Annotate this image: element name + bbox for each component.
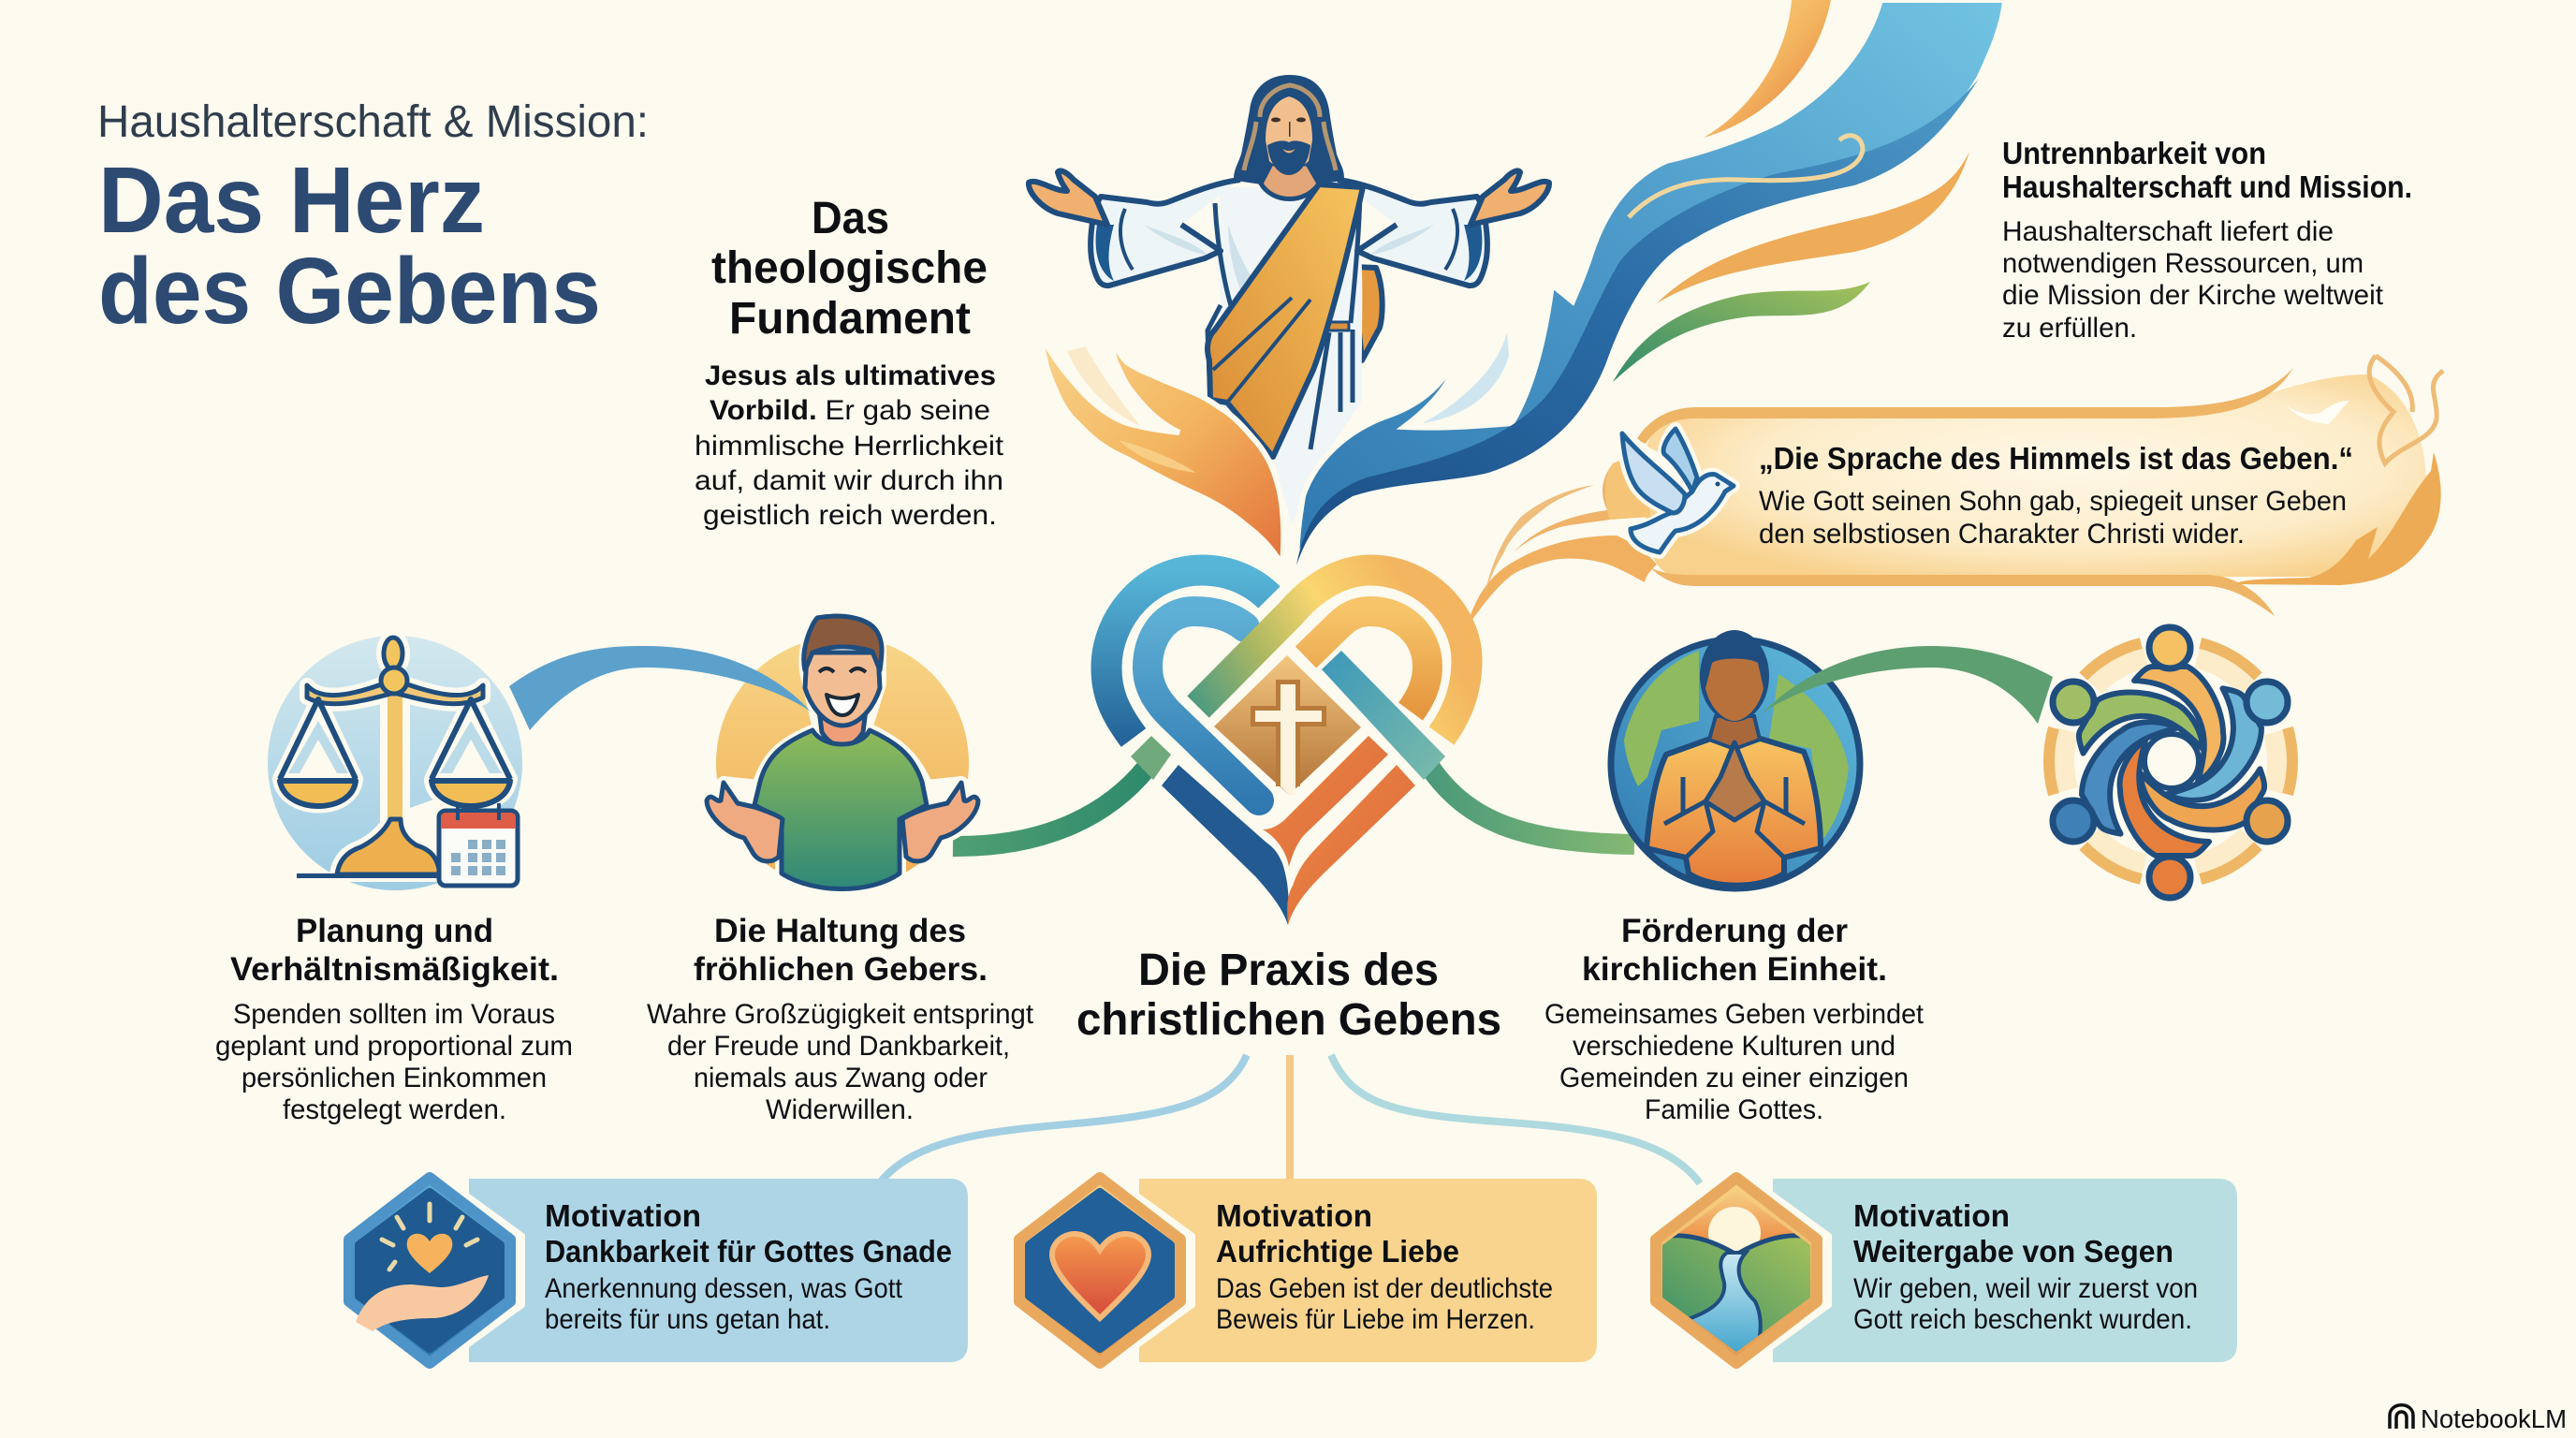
card: sincere love: [1007, 1168, 1597, 1372]
quote body: Wie Gott seinen Sohn gab, spiegeit unser Geben: [1759, 486, 2347, 517]
body: [1216, 1273, 1553, 1335]
body: Wahre Großzügigkeit entspringt: [647, 999, 1034, 1030]
ring glow: [2064, 654, 2277, 868]
body: [1631, 475, 1734, 552]
text block: inseparability: [2002, 136, 2412, 344]
left arm: [707, 783, 783, 861]
heading: [2002, 136, 2412, 204]
right pan: [432, 699, 510, 806]
icon: balance scale with calendar: [268, 636, 522, 890]
hair: [1237, 78, 1341, 182]
center hole: [2144, 734, 2199, 788]
right arm and sleeve: [1338, 180, 1487, 286]
body: persönlichen Einkommen: [242, 1063, 547, 1093]
left hand: [1029, 170, 1107, 225]
icon: praying figure on globe: [1611, 630, 1860, 888]
tunic: [1213, 187, 1362, 524]
flow: orange and green streams: [1613, 0, 1969, 382]
lower-right flame border: [2237, 452, 2441, 585]
heart: [407, 1234, 452, 1273]
mouth: [1282, 149, 1295, 154]
central heading: christlichen Gebens: [1076, 995, 1501, 1045]
body: Haushalterschaft liefert die: [2002, 216, 2334, 247]
body: notwendigen Ressourcen, um: [2002, 248, 2364, 279]
pivot: [381, 668, 407, 694]
river: [1689, 1251, 1763, 1352]
blue outer strand: [1106, 570, 1269, 738]
body: geistlich reich werden.: [703, 500, 997, 531]
circle: [716, 637, 969, 889]
hair: [1700, 630, 1769, 722]
heading: [1853, 1198, 2174, 1269]
sash: [1208, 184, 1363, 457]
torso lines: [1208, 192, 1360, 449]
heading: Dankbarkeit für Gottes Gnade: [545, 1234, 952, 1269]
ribbon darker band: [1296, 79, 1979, 565]
sleeve cuffs: [1120, 209, 1457, 270]
hills: [1658, 1236, 1814, 1357]
ribbon gold swirl: [1629, 136, 1863, 217]
arc: green connector: [1762, 646, 2053, 724]
torso: [1647, 737, 1821, 886]
body: [695, 360, 1004, 531]
left pan: [280, 699, 356, 806]
body: [1853, 1273, 2198, 1335]
body: Anerkennung dessen, was Gott: [545, 1273, 903, 1304]
front wing: [1622, 433, 1685, 513]
shirt: [754, 730, 927, 889]
heading: [694, 913, 988, 988]
icon: hand with heart: [337, 1168, 522, 1372]
card: gratitude: [337, 1168, 968, 1372]
bottom border: [1650, 567, 2275, 616]
quote body: den selbstiosen Charakter Christi wider.: [1759, 519, 2245, 550]
central heading: Die Praxis des: [1138, 946, 1439, 995]
ground line: [297, 873, 442, 878]
arc: blue connector: [509, 646, 811, 730]
body: auf, damit wir durch ihn: [695, 465, 1003, 496]
body: Vorbild. Er gab seine: [710, 395, 990, 426]
teal strand: [1322, 651, 1445, 780]
blue inner strand: [1148, 611, 1259, 800]
neck: [819, 710, 866, 746]
heading: Förderung der: [1621, 913, 1848, 949]
right arm: [902, 783, 978, 861]
rays: [382, 1204, 477, 1269]
heading: Fundament: [729, 294, 971, 344]
logo mark: [2390, 1405, 2413, 1429]
card background: [469, 1179, 968, 1362]
callout fill: [1644, 374, 2426, 577]
main title: [98, 148, 601, 344]
pan inner panes: [288, 721, 502, 773]
body: verschiedene Kulturen und: [1573, 1031, 1895, 1062]
panel: quote callout: [1467, 356, 2443, 627]
body: bereits für uns getan hat.: [545, 1304, 830, 1335]
title block: [97, 97, 649, 344]
sleeve folds: [1664, 777, 1805, 858]
body: geplant und proportional zum: [215, 1031, 573, 1062]
flame highlight: [1119, 440, 1196, 473]
logo text: NotebookLM: [2421, 1404, 2567, 1433]
pale streak: [1067, 346, 1140, 426]
heading: [230, 913, 559, 988]
body: [647, 999, 1034, 1125]
heading: Haushalterschaft und Mission.: [2002, 169, 2412, 204]
heading: Weitergabe von Segen: [1853, 1234, 2174, 1269]
flow: main blue ribbon: [1296, 0, 2005, 565]
beam: [307, 680, 483, 704]
face: [805, 653, 880, 726]
body: Widerwillen.: [766, 1094, 914, 1125]
body: zu erfüllen.: [2002, 313, 2137, 344]
body: Gemeinsames Geben verbindet: [1544, 999, 1925, 1030]
right hand: [1471, 170, 1549, 225]
arms: [2064, 667, 2279, 856]
right connector: [1331, 1055, 1700, 1183]
card background: [1773, 1179, 2237, 1362]
flow: orange flame: [1040, 331, 1283, 565]
beard: [1267, 140, 1310, 175]
card background: [1139, 1179, 1597, 1362]
yellow-green outer strand: [1198, 570, 1467, 736]
card: passing on blessing: [1644, 1168, 2237, 1372]
quote heading: „Die Sprache des Himmels ist das Geben.“: [1759, 441, 2353, 476]
body: Beweis für Liebe im Herzen.: [1216, 1304, 1535, 1335]
heading: Motivation: [1853, 1198, 2010, 1233]
sun: [1708, 1207, 1761, 1251]
central heading: [1076, 946, 1501, 1045]
body: Das Geben ist der deutlichste: [1216, 1273, 1553, 1304]
connectors to motivation cards: [881, 1055, 1700, 1183]
base: [337, 819, 440, 874]
body: die Mission der Kirche weltweit: [2002, 280, 2384, 311]
praying hands: [1705, 742, 1764, 820]
sleeve openings: [1096, 225, 1482, 281]
icon: heart: [1007, 1168, 1193, 1372]
main title: des Gebens: [98, 239, 601, 344]
body: Gemeinden zu einer einzigen: [1559, 1063, 1909, 1093]
left arm and sleeve: [1090, 180, 1240, 286]
face: [1705, 659, 1764, 721]
cross: [1251, 680, 1326, 795]
heading: theologische: [711, 243, 988, 293]
ring: [2049, 639, 2292, 883]
green knot: [1131, 736, 1171, 780]
heading: kirchlichen Einheit.: [1582, 951, 1887, 988]
body: Jesus als ultimatives: [705, 360, 996, 391]
neck: [1261, 164, 1319, 198]
heading: [1216, 1198, 1459, 1269]
body: himmlische Herrlichkeit: [695, 431, 1004, 462]
people heads: [2053, 627, 2288, 898]
pale streak: [1423, 332, 1509, 423]
icon: woven heart with cross: [953, 570, 1634, 925]
body: Familie Gottes.: [1645, 1094, 1823, 1125]
heading: [545, 1198, 952, 1269]
subtitle: Haushalterschaft & Mission:: [97, 97, 649, 147]
icon: community circle: [2049, 627, 2292, 898]
heading: Untrennbarkeit von: [2002, 136, 2266, 170]
hand: [356, 1275, 489, 1331]
heart: [1052, 1234, 1149, 1318]
flame tail to heart: [1467, 459, 1657, 627]
heading: Verhältnismäßigkeit.: [230, 951, 559, 988]
hair highlights: [1244, 85, 1336, 170]
text block: theological foundation: [695, 194, 1004, 531]
landscape: [1662, 1198, 1810, 1352]
heading: Planung und: [296, 913, 493, 949]
body: [1544, 999, 1925, 1125]
continents: [1624, 651, 1849, 843]
pillar: [388, 693, 402, 852]
icon: Jesus figure with open arms: [1029, 78, 1549, 524]
belt: [1318, 322, 1349, 330]
eyes and smile: [819, 668, 866, 672]
top border: [1636, 368, 2293, 444]
heading: Das: [812, 194, 889, 243]
body: [2002, 216, 2384, 344]
sleeve shading: [1144, 225, 1434, 300]
heading: fröhlichen Gebers.: [694, 951, 988, 988]
body: niemals aus Zwang oder: [694, 1063, 988, 1093]
body: [545, 1273, 903, 1335]
orange under-robe: [1353, 267, 1383, 360]
green tail right: [1430, 768, 1634, 844]
body: [215, 999, 573, 1125]
green stream: [1613, 282, 1870, 382]
circle: [268, 636, 522, 890]
icon: dove: [1622, 429, 1734, 552]
white halo: [280, 638, 510, 874]
body: Spenden sollten im Voraus: [233, 999, 555, 1030]
item: planning and proportionality: [215, 913, 573, 1125]
orange lower inner: [1263, 736, 1388, 867]
icon: river landscape: [1644, 1168, 1829, 1372]
calendar: [439, 803, 518, 886]
heading: [711, 194, 988, 344]
orange inner strand: [1306, 611, 1427, 712]
center diamond: [1214, 655, 1361, 795]
left connector: [881, 1055, 1247, 1181]
face: [1266, 96, 1312, 169]
green tail left: [953, 768, 1147, 846]
upper-right flame ornaments: [2369, 356, 2443, 463]
white halo: [707, 616, 978, 873]
eye: [1715, 481, 1720, 487]
middle stream: [1657, 152, 1969, 303]
back wing: [1663, 429, 1697, 492]
sash folds: [1213, 298, 1310, 403]
body: Wir geben, weil wir zuerst von: [1853, 1273, 2198, 1304]
body: Gott reich beschenkt wurden.: [1853, 1304, 2192, 1335]
globe: [1611, 639, 1860, 888]
heading: Motivation: [1216, 1198, 1372, 1233]
center connector: [1286, 1055, 1294, 1181]
dark blue lower: [1162, 765, 1289, 925]
heading: [1582, 913, 1887, 988]
heading: Die Haltung des: [714, 913, 966, 949]
heading: Motivation: [545, 1198, 701, 1233]
main title: Das Herz: [98, 148, 485, 253]
top stream: [1704, 0, 1831, 138]
body: der Freude und Dankbarkeit,: [667, 1031, 1010, 1062]
icon: joyful giver: [707, 616, 978, 889]
logo: NotebookLM: [2390, 1404, 2567, 1433]
body: festgelegt werden.: [283, 1094, 506, 1125]
heading: Aufrichtige Liebe: [1216, 1234, 1459, 1269]
orange lower outer: [1287, 765, 1415, 925]
eyes: [1271, 118, 1306, 137]
item: church unity: [1544, 913, 1925, 1125]
neck: [1709, 716, 1760, 749]
finial: [384, 638, 402, 669]
hair: [804, 616, 882, 670]
quote body: [1759, 486, 2347, 550]
item: joyful giver: [647, 913, 1034, 1125]
small pale dove: [2287, 401, 2349, 424]
